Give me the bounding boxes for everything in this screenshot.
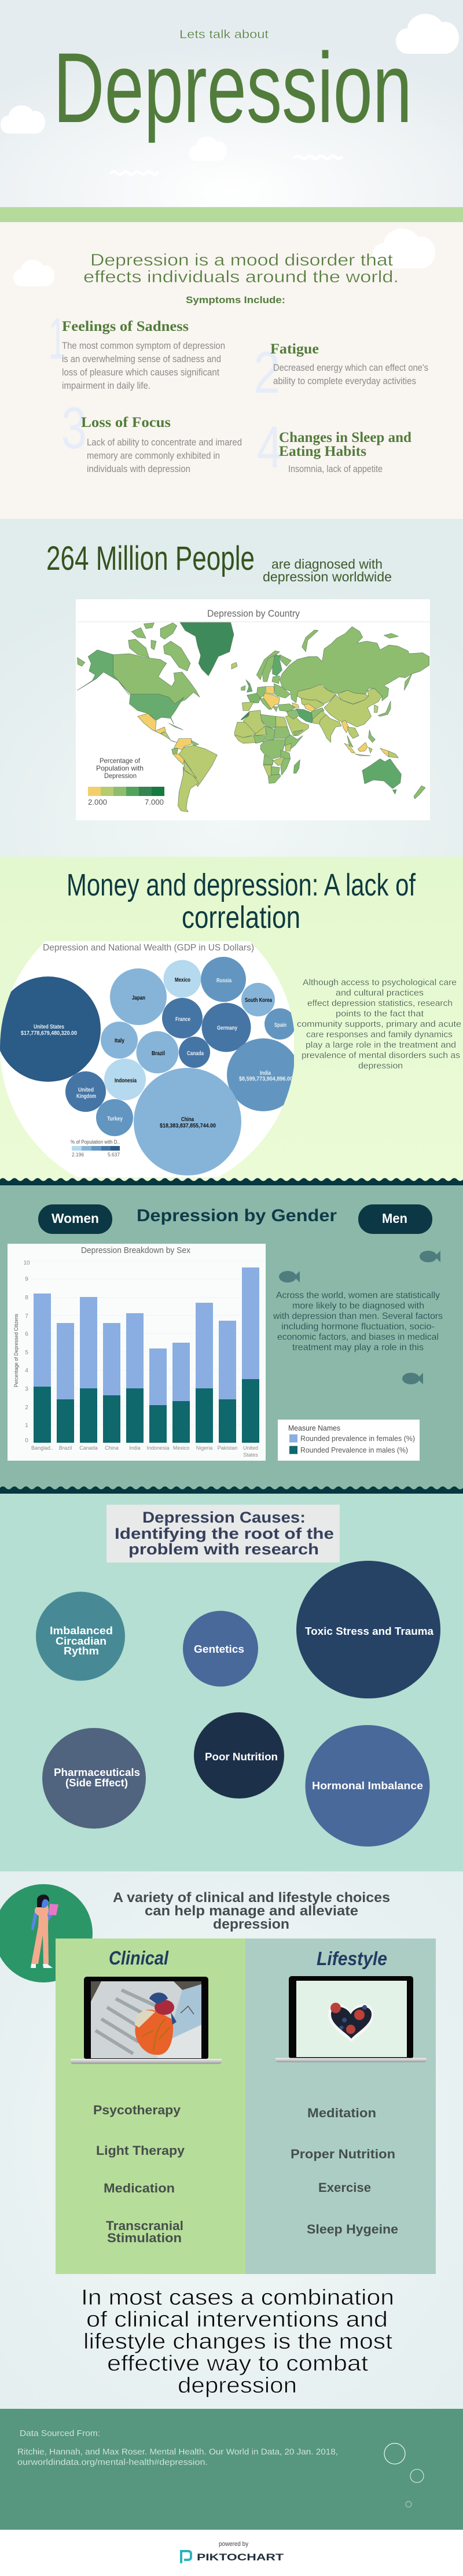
symptom: feelings of sadness: is an overwhelming sense of sadness and [62, 353, 221, 364]
paragraph: Although access to psychological care [303, 978, 457, 987]
chart legend [278, 1420, 420, 1461]
conclusion statement [81, 2286, 394, 2398]
panel: treatment [0, 1871, 463, 2409]
symptom: fatigue [270, 341, 428, 386]
cause: imbalanced circadian rythm: Imbalanced [50, 1625, 113, 1637]
y axis: 0 [25, 1438, 28, 1444]
squiggle left [111, 171, 157, 175]
pill: men: Men [382, 1211, 407, 1226]
symptom: feelings of sadness [62, 319, 225, 391]
cause: pharmaceuticals: (Side Effect) [65, 1777, 128, 1789]
symptom: fatigue: Fatigue [270, 341, 319, 357]
sources text: Ritchie, Hannah, and Max Roser. Mental Health. Our World in Data, 20 Jan. 2018, [17, 2448, 338, 2457]
x axis labels: Canada [79, 1445, 98, 1451]
icon: fish [279, 1271, 300, 1283]
bubble labels: Canada [187, 1051, 204, 1057]
bubble labels: France [175, 1016, 190, 1023]
female bars [34, 1267, 259, 1405]
bubble labels: $8,599,773,904,896.00 [239, 1076, 293, 1082]
y axis [23, 1260, 30, 1444]
icon: fish [402, 1373, 423, 1384]
statistic caption: are diagnosed with [271, 557, 383, 572]
bubble labels: Kingdom [76, 1093, 96, 1100]
bubble outlines [384, 2444, 424, 2507]
symptom: loss of focus: Lack of ability to concentrate and imared [87, 437, 242, 448]
y axis: 9 [25, 1276, 28, 1283]
x axis labels: India [129, 1445, 141, 1451]
y axis: 4 [25, 1368, 28, 1374]
heading: Depression is a mood disorder that [90, 251, 393, 270]
paragraph: effect depression statistics, research [307, 998, 453, 1008]
heading [67, 868, 416, 935]
column heading: Lifestyle [317, 1948, 387, 1969]
chart: bubble chart of national wealth [0, 941, 294, 1177]
bubble legend: 5.637 [108, 1152, 120, 1158]
paragraph: more likely to be diagnosed with [292, 1301, 424, 1311]
lifestyle items: Sleep Hygeine [307, 2222, 398, 2236]
kicker: Lets talk about [179, 28, 269, 41]
bubble labels: Germany [217, 1025, 237, 1031]
bubble labels: South Korea [245, 997, 272, 1004]
paragraph: Across the world, women are statistically [276, 1291, 440, 1300]
symptom: sleep and eating: Insomnia, lack of appetite [288, 463, 383, 474]
heading [113, 1890, 390, 1932]
x axis labels [31, 1445, 258, 1458]
bubble labels: Italy [115, 1038, 124, 1044]
y axis: 1 [25, 1422, 28, 1429]
x axis labels: Pakistan [218, 1445, 237, 1451]
symptom: feelings of sadness: impairment in daily life. [62, 380, 150, 391]
bubble labels: $17,778,679,480,320.00 [21, 1030, 77, 1037]
bubble labels: Brazil [152, 1051, 165, 1057]
panel: money and depression [0, 857, 463, 1195]
bubble labels: China [181, 1116, 194, 1123]
bubble labels: United States [34, 1024, 64, 1030]
cause: poor nutrition [194, 1712, 284, 1799]
x axis labels: Brazil [59, 1445, 72, 1451]
symptom: feelings of sadness: loss of pleasure which causes significant [62, 367, 219, 378]
male bars [34, 1379, 259, 1443]
x axis labels: Mexico [173, 1445, 189, 1451]
bubble labels: Spain [274, 1022, 286, 1029]
wave band bottom [0, 1486, 463, 1494]
y axis: 7 [25, 1313, 28, 1320]
symptom: fatigue: ability to complete everyday activities [273, 375, 416, 386]
x axis labels: United [243, 1445, 258, 1451]
powered by label: powered by [219, 2541, 248, 2548]
panel: depression causes [0, 1494, 463, 1871]
heading: can help manage and alleviate [145, 1903, 358, 1919]
pill: women: Women [52, 1211, 99, 1226]
cause: genetics [183, 1611, 258, 1687]
nurse figure [31, 1895, 58, 1968]
column heading: Clinical [109, 1947, 169, 1969]
bubble legend: 2.196 [72, 1152, 84, 1158]
paragraph: community supports, primary and acute [297, 1019, 461, 1029]
heading: effects individuals around the world. [83, 268, 399, 286]
sources text: Data Sourced From: [20, 2429, 100, 2438]
bubble labels: Mexico [175, 977, 190, 983]
x axis labels: States [243, 1452, 258, 1458]
world map: europe, africa, asia and oceania [232, 627, 429, 799]
heading box [106, 1505, 340, 1562]
heading box: Depression Causes: [142, 1509, 306, 1526]
clinical items: Light Therapy [96, 2143, 185, 2158]
clinical items [93, 2103, 185, 2245]
bubble labels: United [78, 1087, 94, 1093]
paragraph [273, 1291, 443, 1353]
map legend: Depression [104, 772, 137, 780]
bubble labels: Turkey [107, 1116, 123, 1122]
chart legend: Rounded prevalence in females (%) [300, 1434, 415, 1443]
y axis: 3 [25, 1386, 28, 1392]
symptom: loss of focus [81, 415, 242, 474]
cloud left [13, 260, 54, 286]
cloud left [1, 105, 45, 134]
cause: hormonal imbalance [306, 1725, 429, 1847]
bubble labels: India [260, 1070, 271, 1077]
heading: depression [213, 1917, 289, 1932]
clinical items: Medication [104, 2181, 175, 2195]
chart: breakdown by sex [8, 1244, 266, 1461]
conclusion statement: lifestyle changes is the most [83, 2330, 392, 2354]
map legend: Population with [96, 764, 144, 772]
cause: pharmaceuticals: Pharmaceuticals [54, 1767, 140, 1778]
statistic caption [263, 557, 392, 584]
conclusion statement: effective way to combat [107, 2352, 368, 2376]
cause: toxic stress and trauma: Toxic Stress and Trauma [305, 1626, 434, 1637]
heading [83, 251, 399, 286]
panel: world map section [0, 519, 463, 857]
cloud right [372, 229, 435, 268]
cause: genetics: Gentetics [194, 1643, 244, 1655]
paragraph: depression [358, 1061, 403, 1071]
icon: fish [420, 1251, 440, 1262]
big numerals: 4 [257, 414, 282, 480]
symptom: sleep and eating: Changes in Sleep and [279, 430, 411, 445]
green band [0, 207, 463, 222]
wave band top [0, 1177, 463, 1185]
y axis label: Percentage of Depressed Citizens [13, 1314, 20, 1387]
big numerals: 3 [61, 395, 87, 461]
heading box: problem with research [128, 1541, 319, 1558]
symptom: loss of focus: individuals with depression [87, 463, 190, 474]
symptom: feelings of sadness: The most common symptom of depression [62, 340, 225, 351]
panel: symptoms [0, 222, 463, 519]
paragraph: with depression than men. Several factors [273, 1311, 443, 1321]
x axis labels: Nigeria [196, 1445, 212, 1451]
x axis labels: Banglad.. [31, 1445, 53, 1451]
lifestyle items [291, 2106, 398, 2236]
cause: imbalanced circadian rythm: Rythm [64, 1645, 99, 1657]
heading: A variety of clinical and lifestyle choices [113, 1890, 390, 1906]
icon: piktochart logo [181, 2551, 191, 2563]
chart title: Depression Breakdown by Sex [81, 1245, 190, 1255]
paragraph: points to the fact that [336, 1009, 424, 1019]
cause: pharmaceuticals [42, 1728, 146, 1829]
y axis: 2 [25, 1405, 28, 1411]
y axis: 10 [23, 1260, 30, 1266]
paragraph: economic factors, and biases in medical [277, 1332, 439, 1342]
conclusion statement: of clinical interventions and [86, 2308, 388, 2332]
big numerals: 2 [253, 340, 280, 406]
heading box: Identifying the root of the [115, 1525, 334, 1542]
piktochart wordmark: PIKTOCHART [197, 2552, 284, 2563]
bubble labels [21, 977, 293, 1129]
y axis: 6 [25, 1331, 28, 1337]
x axis labels: China [105, 1445, 119, 1451]
conclusion statement: depression [178, 2374, 297, 2398]
laptop with heart model photo [71, 1977, 222, 2064]
chart title: Depression and National Wealth (GDP in US Dollars) [43, 943, 254, 953]
y axis: 8 [25, 1295, 28, 1301]
laptop with berry heart photo [275, 1976, 427, 2062]
statistic headline: 264 Million People [46, 540, 255, 577]
cause: poor nutrition: Poor Nutrition [205, 1751, 278, 1763]
clinical items: Psycotherapy [93, 2103, 181, 2117]
column: lifestyle [245, 1939, 436, 2274]
big numerals [49, 305, 282, 480]
paragraph: care responses and family dynamics [306, 1030, 453, 1040]
symptom: sleep and eating [279, 430, 411, 474]
powered by footer [0, 2530, 463, 2576]
column: clinical [56, 1939, 245, 2274]
subheading: Symptoms Include: [186, 294, 285, 305]
cloud top right [396, 14, 459, 54]
heading: correlation [182, 900, 300, 935]
paragraph: including hormone fluctuation, socio- [281, 1322, 435, 1332]
chart title: Depression by Country [207, 608, 300, 619]
paragraph: play a large role in the treatment and [306, 1040, 456, 1050]
heading: Depression by Gender [137, 1206, 337, 1225]
map legend [88, 757, 164, 806]
symptom: loss of focus: Loss of Focus [81, 415, 171, 430]
symptom: feelings of sadness: Feelings of Sadness [62, 319, 189, 334]
icon: nurse in green circle [0, 1884, 93, 1982]
lifestyle items: Proper Nutrition [291, 2147, 395, 2161]
map legend: 2.000 [88, 798, 107, 806]
lifestyle items: Meditation [307, 2106, 376, 2120]
bubble labels: Russia [216, 978, 232, 984]
chart legend: Rounded Prevalence in males (%) [300, 1446, 408, 1454]
cloud centre [189, 137, 227, 161]
cause: hormonal imbalance: Hormonal Imbalance [312, 1780, 423, 1792]
paragraph: and cultural practices [336, 988, 424, 998]
bubble labels: $18,383,837,855,744.00 [160, 1123, 216, 1129]
symptom: fatigue: Decreased energy which can effect one's [273, 362, 428, 373]
clinical items: Transcranial [106, 2218, 183, 2233]
squiggle right [295, 156, 341, 159]
world map: americas and greenland [78, 622, 234, 812]
panel: data sources footer [0, 2409, 463, 2530]
bubble labels: Japan [132, 995, 145, 1001]
pill: women [38, 1204, 112, 1234]
symptom: loss of focus: memory are commonly exhibited in [87, 450, 220, 461]
sources text: ourworldindata.org/mental-health#depression. [17, 2458, 208, 2467]
lifestyle items: Exercise [318, 2180, 371, 2195]
bubble legend: % of Population with D.. [71, 1139, 120, 1145]
chart legend: Measure Names [288, 1424, 340, 1432]
paragraph: prevalence of mental disorders such as [302, 1051, 460, 1060]
sources text [17, 2429, 338, 2467]
bubble legend [71, 1140, 120, 1156]
statistic caption: depression worldwide [263, 569, 392, 584]
big numerals: 1 [49, 305, 66, 371]
paragraph [297, 978, 461, 1071]
cause: toxic stress and trauma [296, 1561, 440, 1698]
map legend: Percentage of [100, 757, 141, 765]
cause: imbalanced circadian rythm: Circadian [56, 1635, 106, 1647]
map legend: 7.000 [145, 798, 164, 806]
bubble labels: Indonesia [115, 1078, 137, 1084]
x axis labels: Indonesia [146, 1445, 170, 1451]
hero section [0, 0, 463, 208]
cause: imbalanced circadian rythm [36, 1592, 125, 1681]
pill: men [358, 1204, 432, 1234]
panel: depression by gender [0, 1177, 463, 1494]
symptom: sleep and eating: Eating Habits [279, 444, 366, 459]
clinical items: Stimulation [107, 2231, 182, 2245]
conclusion statement: In most cases a combination [81, 2286, 394, 2310]
chart: depression by country [76, 599, 430, 820]
y axis: 5 [25, 1350, 28, 1356]
paragraph: treatment may play a role in this [292, 1343, 424, 1353]
